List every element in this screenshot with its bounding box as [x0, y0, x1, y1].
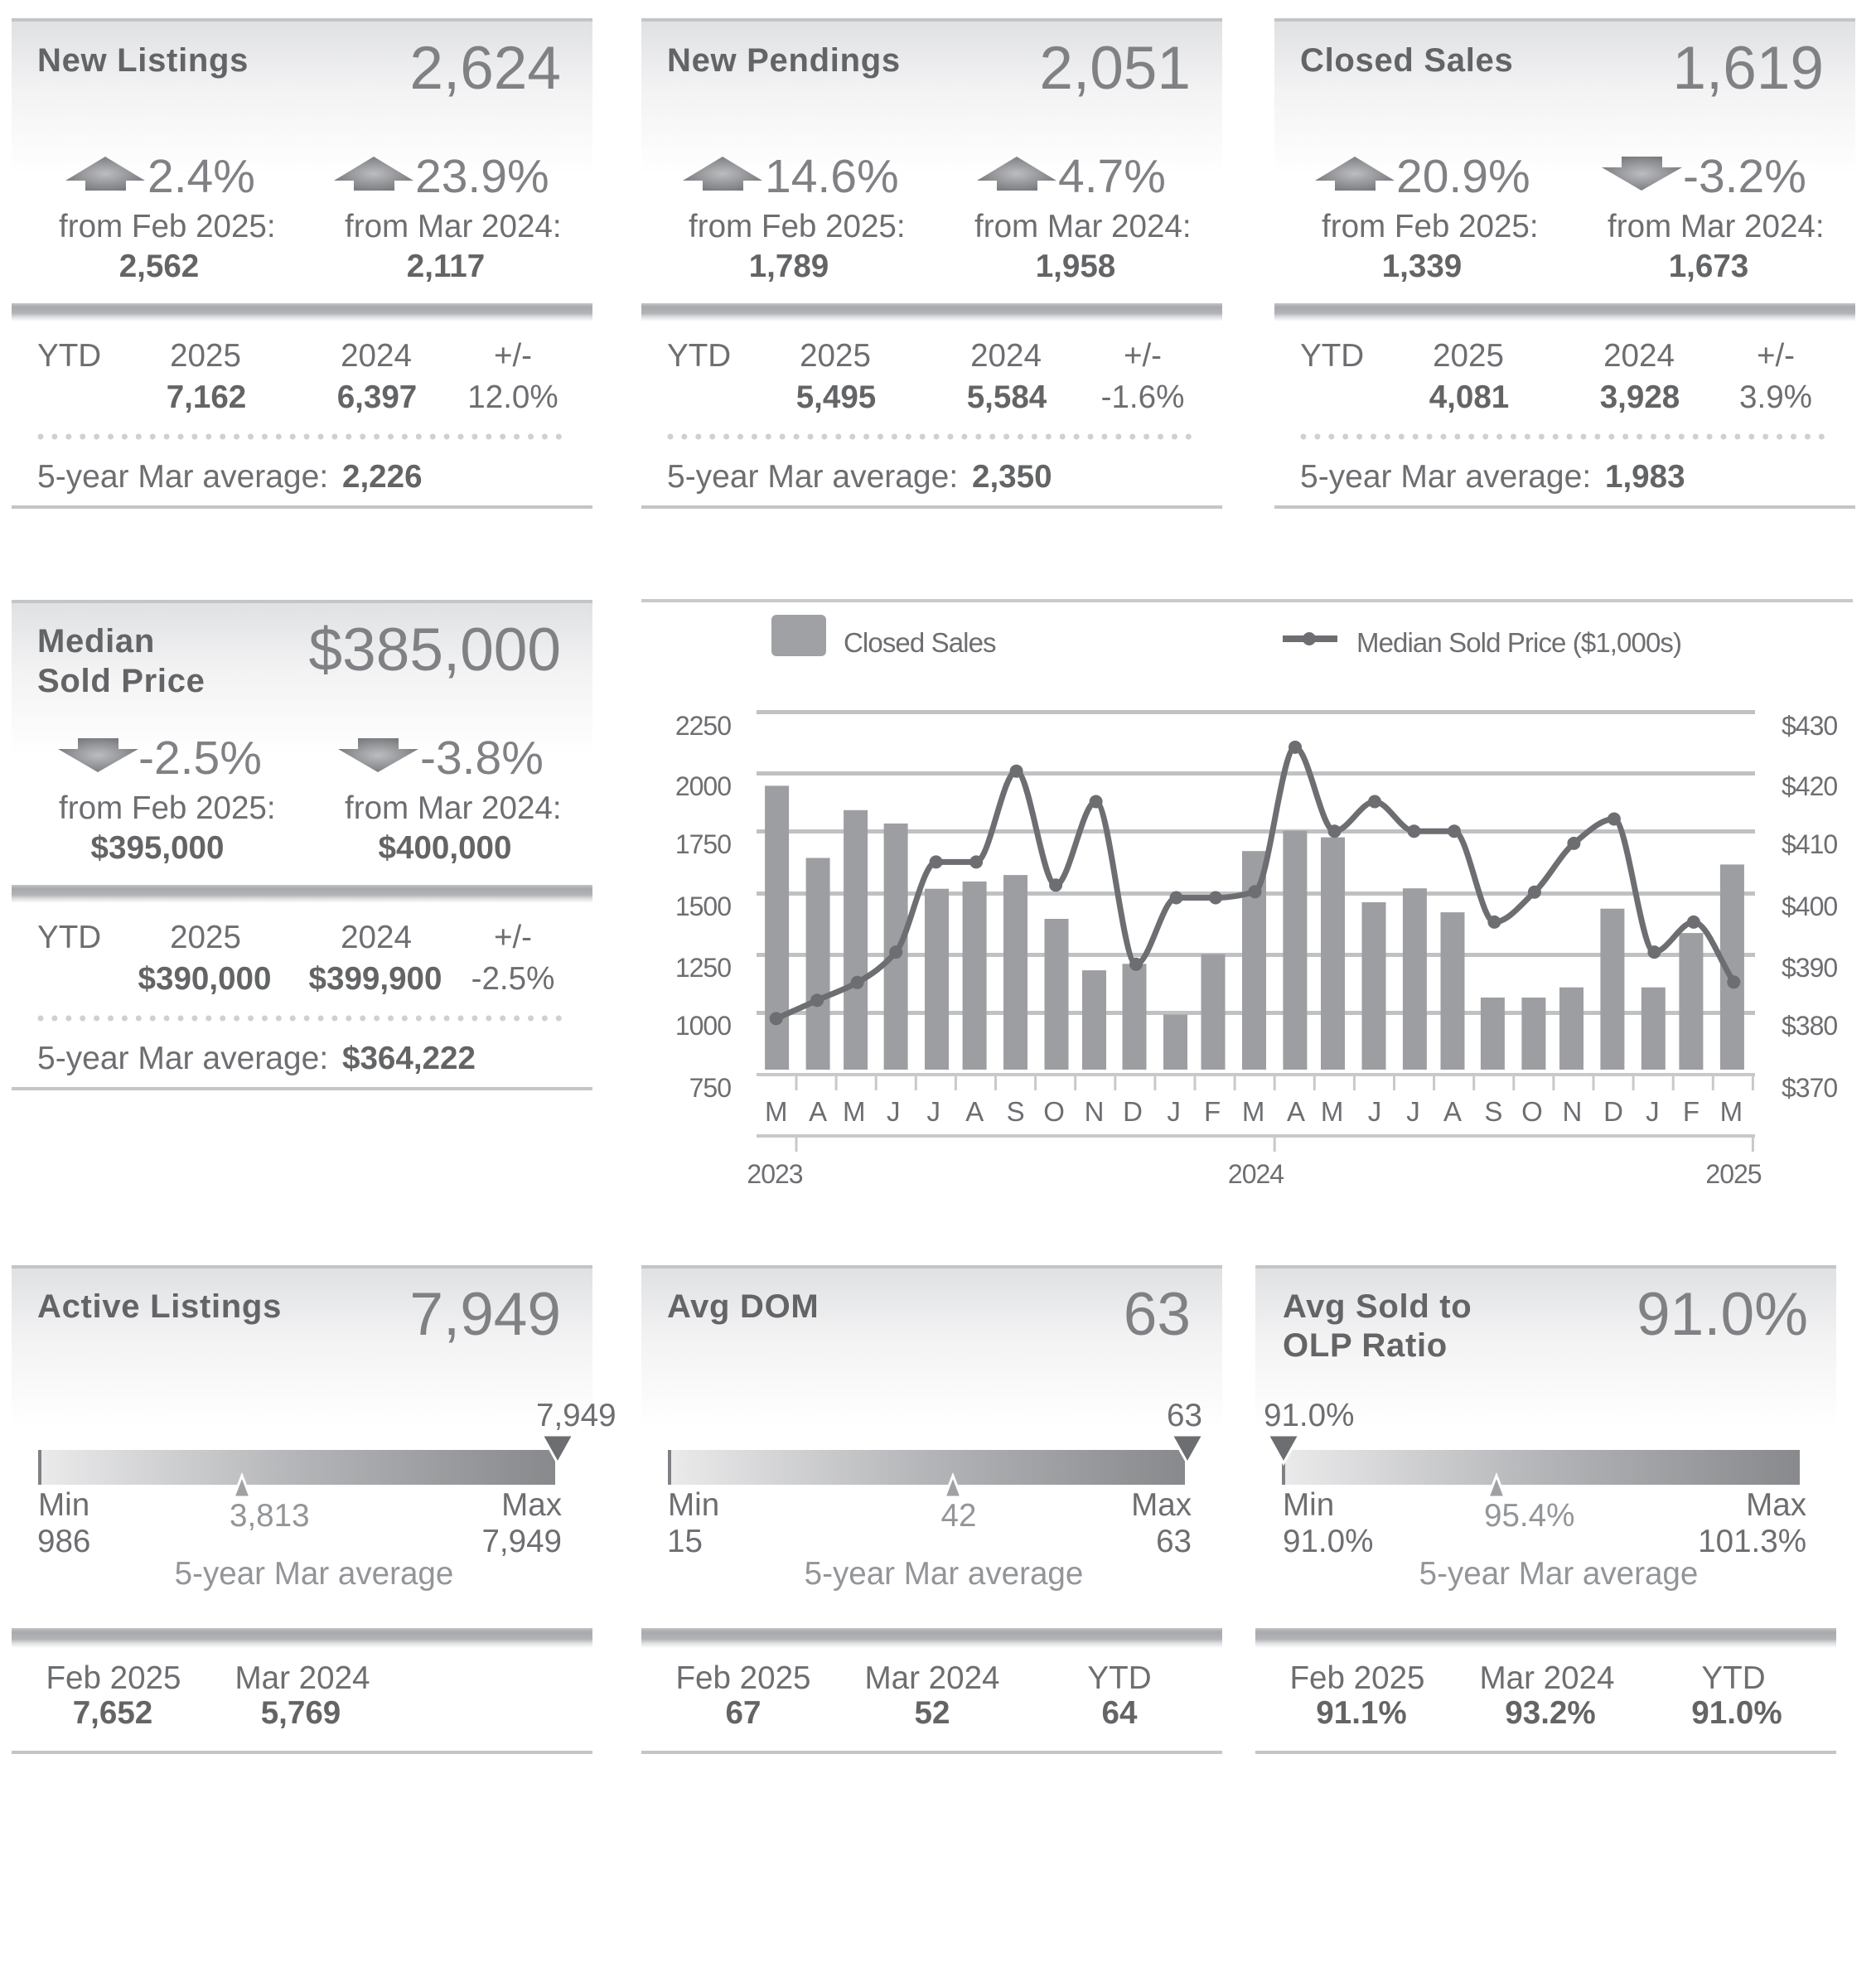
year labels [747, 1159, 1762, 1189]
percent change from Feb: 20.9% [1396, 150, 1530, 203]
YTD 2025 value: 5,495 [796, 379, 876, 415]
month labels: M [765, 1096, 787, 1127]
comparison label: from Feb 2025: [59, 209, 276, 244]
percent change from Mar: -3.2% [1683, 150, 1806, 203]
comparison value: $400,000 [379, 830, 511, 866]
title: Active Listings [37, 1288, 282, 1325]
year labels: 2024 [1228, 1159, 1284, 1189]
current value label: 63 [1167, 1398, 1202, 1433]
month labels: M [1720, 1096, 1743, 1127]
comparison value: 1,673 [1669, 249, 1748, 284]
left axis labels: 750 [689, 1073, 731, 1103]
month labels: N [1085, 1096, 1105, 1127]
marker: 5-year average [234, 1476, 250, 1497]
marker: current [542, 1435, 573, 1463]
comparison value: 1,958 [1036, 249, 1115, 284]
average label: 5-year Mar average [805, 1556, 1083, 1592]
title: New Pendings [667, 42, 901, 79]
percent change from Feb: 2.4% [147, 150, 255, 203]
average value: 3,813 [230, 1498, 310, 1534]
month labels: J [1646, 1096, 1660, 1127]
Feb value: 67 [726, 1695, 761, 1731]
icon: down arrow [58, 738, 138, 772]
panel: Closed Sales [1274, 18, 1855, 509]
title: Avg Sold to [1283, 1288, 1472, 1325]
min value: 15 [667, 1524, 703, 1559]
max value: 63 [1156, 1524, 1192, 1559]
Mar label: Mar 2024 [1480, 1660, 1614, 1696]
Mar value: 93.2% [1505, 1695, 1596, 1731]
icon: down arrow [338, 738, 418, 772]
comparison value: 2,562 [119, 249, 199, 284]
month labels: J [926, 1096, 940, 1127]
month labels: M [1321, 1096, 1343, 1127]
current value label: 91.0% [1264, 1398, 1354, 1433]
YTD 2024: 2024 [341, 338, 412, 374]
left axis labels: 2000 [675, 771, 731, 801]
Feb label: Feb 2025 [1289, 1660, 1425, 1696]
panel: New Listings [12, 18, 592, 509]
current value label: 7,949 [536, 1398, 616, 1433]
YTD 2025: 2025 [170, 920, 241, 955]
comparison label: from Feb 2025: [59, 790, 276, 826]
comparison label: from Feb 2025: [689, 209, 906, 244]
value: 1,619 [1672, 35, 1824, 102]
year labels: 2023 [747, 1159, 803, 1189]
icon: down arrow [1602, 157, 1682, 191]
YTD 2024: 2024 [970, 338, 1042, 374]
YTD 2024 value: 6,397 [337, 379, 417, 415]
YTD 2024 value: 5,584 [967, 379, 1047, 415]
max label: Max [1131, 1487, 1192, 1523]
legend: median price line [1283, 632, 1337, 645]
legend: median price label: Median Sold Price ($1,000s) [1356, 627, 1681, 658]
5-year average: 5-year Mar average: [37, 1041, 328, 1076]
icon: up arrow [334, 157, 413, 191]
YTD 2025: 2025 [1433, 338, 1504, 374]
YTD value: 64 [1102, 1695, 1138, 1731]
5-year average: 5-year Mar average: [667, 459, 958, 495]
average value: 95.4% [1484, 1498, 1574, 1534]
month labels: D [1603, 1096, 1623, 1127]
title line 2: OLP Ratio [1283, 1327, 1448, 1364]
right axis labels: $370 [1782, 1073, 1837, 1103]
YTD label: YTD [37, 338, 101, 374]
marker: 5-year average [1488, 1476, 1505, 1497]
min value: 91.0% [1283, 1524, 1373, 1559]
month labels [765, 1096, 1743, 1127]
Mar value: 52 [915, 1695, 950, 1731]
YTD 2024 value: 3,928 [1600, 379, 1680, 415]
value: 63 [1124, 1281, 1191, 1348]
panel: Active Listings [12, 1265, 616, 1754]
comparison value: 2,117 [407, 249, 485, 284]
comparison value: 1,789 [749, 249, 829, 284]
5-year average: 5-year Mar average: [1300, 459, 1591, 495]
right axis labels [1782, 711, 1837, 1103]
value: 2,051 [1039, 35, 1191, 102]
max value: 7,949 [481, 1524, 562, 1559]
month labels: O [1521, 1096, 1543, 1127]
value: 91.0% [1637, 1281, 1808, 1348]
month labels: A [1443, 1096, 1462, 1127]
month labels: J [1167, 1096, 1181, 1127]
legend: closed sales swatch [771, 615, 826, 656]
value: $385,000 [309, 616, 561, 684]
icon: up arrow [1315, 157, 1395, 191]
icon: up arrow [65, 157, 145, 191]
percent change from Mar: 4.7% [1058, 150, 1166, 203]
YTD change value: -2.5% [471, 961, 554, 997]
min value: 986 [37, 1524, 90, 1559]
left axis labels: 2250 [675, 711, 731, 741]
month labels: M [843, 1096, 865, 1127]
range bar [38, 1450, 555, 1485]
max value: 101.3% [1698, 1524, 1806, 1559]
comparison value: $395,000 [91, 830, 224, 866]
marker: current [1268, 1435, 1299, 1463]
YTD value: 91.0% [1691, 1695, 1782, 1731]
Mar label: Mar 2024 [235, 1660, 370, 1696]
chart: closed sales and median sold price [641, 599, 1853, 1189]
Feb value: 7,652 [73, 1695, 152, 1731]
range bar [668, 1450, 1185, 1485]
percent change from Mar: 23.9% [415, 150, 549, 203]
panel: Avg DOM [641, 1265, 1222, 1754]
YTD 2025 value: $390,000 [138, 961, 271, 997]
comparison label: from Mar 2024: [345, 790, 562, 826]
YTD change value: 12.0% [467, 379, 558, 415]
month labels: F [1683, 1096, 1700, 1127]
title: Median [37, 623, 155, 660]
YTD change header: +/- [494, 338, 532, 374]
month labels: A [965, 1096, 984, 1127]
YTD change header: +/- [1124, 338, 1162, 374]
5-year average value: 1,983 [1605, 459, 1685, 495]
title: New Listings [37, 42, 249, 79]
Feb label: Feb 2025 [46, 1660, 181, 1696]
month labels: J [887, 1096, 900, 1127]
YTD 2025: 2025 [170, 338, 241, 374]
line: median sold price [770, 741, 1740, 1025]
5-year average value: $364,222 [342, 1041, 476, 1076]
year labels: 2025 [1705, 1159, 1762, 1189]
bars: closed sales [765, 785, 1744, 1070]
panel: Median Sold Price [12, 600, 592, 1090]
Feb label: Feb 2025 [675, 1660, 811, 1696]
legend: closed sales label: Closed Sales [844, 627, 996, 658]
right axis labels: $390 [1782, 953, 1837, 983]
value: 2,624 [409, 35, 561, 102]
left axis labels: 1000 [675, 1011, 731, 1041]
YTD change header: +/- [494, 920, 532, 955]
left axis labels [675, 711, 731, 1103]
YTD label: YTD [1087, 1660, 1152, 1696]
month labels: F [1204, 1096, 1221, 1127]
right axis labels: $410 [1782, 829, 1837, 859]
month labels: S [1007, 1096, 1025, 1127]
comparison label: from Mar 2024: [345, 209, 562, 244]
month labels: N [1562, 1096, 1582, 1127]
YTD change header: +/- [1757, 338, 1795, 374]
YTD 2025 value: 4,081 [1429, 379, 1509, 415]
icon: up arrow [977, 157, 1056, 191]
left axis labels: 1250 [675, 953, 731, 983]
month labels: J [1406, 1096, 1420, 1127]
YTD 2025: 2025 [800, 338, 871, 374]
comparison label: from Feb 2025: [1322, 209, 1539, 244]
YTD 2024: 2024 [341, 920, 412, 955]
YTD label: YTD [667, 338, 731, 374]
YTD 2025 value: 7,162 [167, 379, 246, 415]
min label: Min [38, 1487, 89, 1523]
min label: Min [1283, 1487, 1334, 1523]
panel: Avg Sold to OLP Ratio [1255, 1265, 1836, 1754]
YTD label: YTD [37, 920, 101, 955]
month labels: A [1287, 1096, 1305, 1127]
YTD change value: 3.9% [1739, 379, 1812, 415]
right axis labels: $400 [1782, 892, 1837, 921]
5-year average: 5-year Mar average: [37, 459, 328, 495]
min label: Min [668, 1487, 719, 1523]
title line 2: Sold Price [37, 663, 205, 699]
percent change from Feb: 14.6% [765, 150, 899, 203]
month labels: M [1242, 1096, 1264, 1127]
max label: Max [1746, 1487, 1806, 1523]
max label: Max [501, 1487, 562, 1523]
value: 7,949 [409, 1281, 561, 1348]
icon: up arrow [683, 157, 762, 191]
average label: 5-year Mar average [175, 1556, 453, 1592]
left axis labels: 1500 [675, 892, 731, 921]
average label: 5-year Mar average [1419, 1556, 1698, 1592]
range bar [1282, 1450, 1800, 1485]
comparison label: from Mar 2024: [1608, 209, 1825, 244]
YTD 2024 value: $399,900 [309, 961, 442, 997]
YTD label: YTD [1300, 338, 1364, 374]
average value: 42 [941, 1498, 976, 1534]
marker: current [1172, 1435, 1203, 1463]
month labels: S [1484, 1096, 1502, 1127]
right axis labels: $380 [1782, 1011, 1837, 1041]
percent change from Mar: -3.8% [420, 732, 544, 785]
marker: 5-year average [945, 1476, 961, 1497]
month labels: J [1368, 1096, 1381, 1127]
left axis labels: 1750 [675, 829, 731, 859]
YTD label: YTD [1701, 1660, 1766, 1696]
YTD 2024: 2024 [1603, 338, 1675, 374]
right axis labels: $430 [1782, 711, 1837, 741]
5-year average value: 2,350 [972, 459, 1052, 495]
comparison value: 1,339 [1382, 249, 1462, 284]
Feb value: 91.1% [1316, 1695, 1407, 1731]
panel: New Pendings [641, 18, 1222, 509]
YTD change value: -1.6% [1101, 379, 1184, 415]
Mar value: 5,769 [261, 1695, 341, 1731]
month labels: D [1123, 1096, 1143, 1127]
title: Closed Sales [1300, 42, 1513, 79]
title: Avg DOM [667, 1288, 819, 1325]
percent change from Feb: -2.5% [138, 732, 262, 785]
right axis labels: $420 [1782, 771, 1837, 801]
5-year average value: 2,226 [342, 459, 423, 495]
month labels: O [1043, 1096, 1065, 1127]
comparison label: from Mar 2024: [974, 209, 1192, 244]
Mar label: Mar 2024 [865, 1660, 999, 1696]
month labels: A [809, 1096, 827, 1127]
